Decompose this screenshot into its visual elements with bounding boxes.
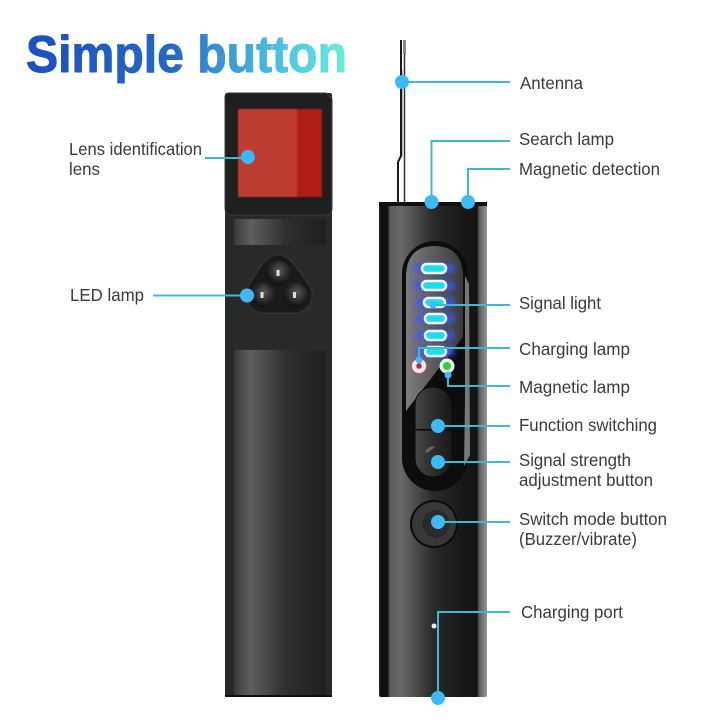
callout: signal light: Signal light — [519, 293, 601, 313]
callout: magnetic detection: Magnetic detection — [519, 159, 660, 179]
side strip — [464, 276, 470, 466]
title: Simple button — [26, 26, 347, 84]
callout: antenna — [395, 73, 583, 93]
callout: antenna: Antenna — [520, 73, 583, 93]
callout: charging lamp: Charging lamp — [519, 339, 630, 359]
callout: switch mode button: Switch mode button — [519, 509, 667, 529]
signal lights — [413, 264, 455, 356]
callout: magnetic lamp: Magnetic lamp — [519, 377, 630, 397]
callout: signal light — [430, 293, 601, 313]
callout: magnetic detection — [461, 159, 660, 209]
control capsule — [402, 241, 468, 491]
callout: lens identification: Lens identification — [69, 139, 202, 159]
callout: lens identification — [69, 139, 255, 179]
antenna — [398, 40, 406, 202]
callout: LED lamp: LED lamp — [70, 285, 144, 305]
callout: lens identification: lens — [69, 159, 100, 179]
callout: LED lamp — [70, 285, 254, 305]
callout: charging lamp — [416, 339, 630, 364]
callout: function switching: Function switching — [519, 415, 657, 435]
callout: charging port: Charging port — [521, 602, 623, 622]
function buttons — [415, 387, 452, 477]
callout: switch mode button — [431, 509, 667, 549]
callout: charging port — [431, 602, 623, 705]
device body front — [379, 202, 487, 697]
lens frame — [225, 93, 332, 215]
lower panel — [234, 350, 326, 695]
round mode button — [410, 500, 458, 548]
magnetic indicator — [440, 358, 454, 374]
charging port dot — [432, 624, 436, 628]
callout: signal strength button — [431, 450, 653, 490]
indicator panel — [406, 246, 463, 411]
device: front view — [379, 40, 487, 697]
callout: search lamp: Search lamp — [519, 129, 614, 149]
callout: search lamp — [424, 129, 614, 209]
device body back — [225, 93, 332, 697]
callout: signal strength button: Signal strength — [519, 450, 631, 470]
upper band — [234, 219, 326, 245]
callout: function switching — [431, 415, 657, 435]
LED cluster — [250, 260, 308, 308]
charging indicator — [412, 358, 426, 374]
red lens — [238, 109, 322, 197]
callout: magnetic lamp — [444, 372, 630, 397]
callout: signal strength button: adjustment button — [519, 470, 653, 490]
callout: switch mode button: (Buzzer/vibrate) — [519, 529, 637, 549]
device: back view — [225, 93, 332, 697]
